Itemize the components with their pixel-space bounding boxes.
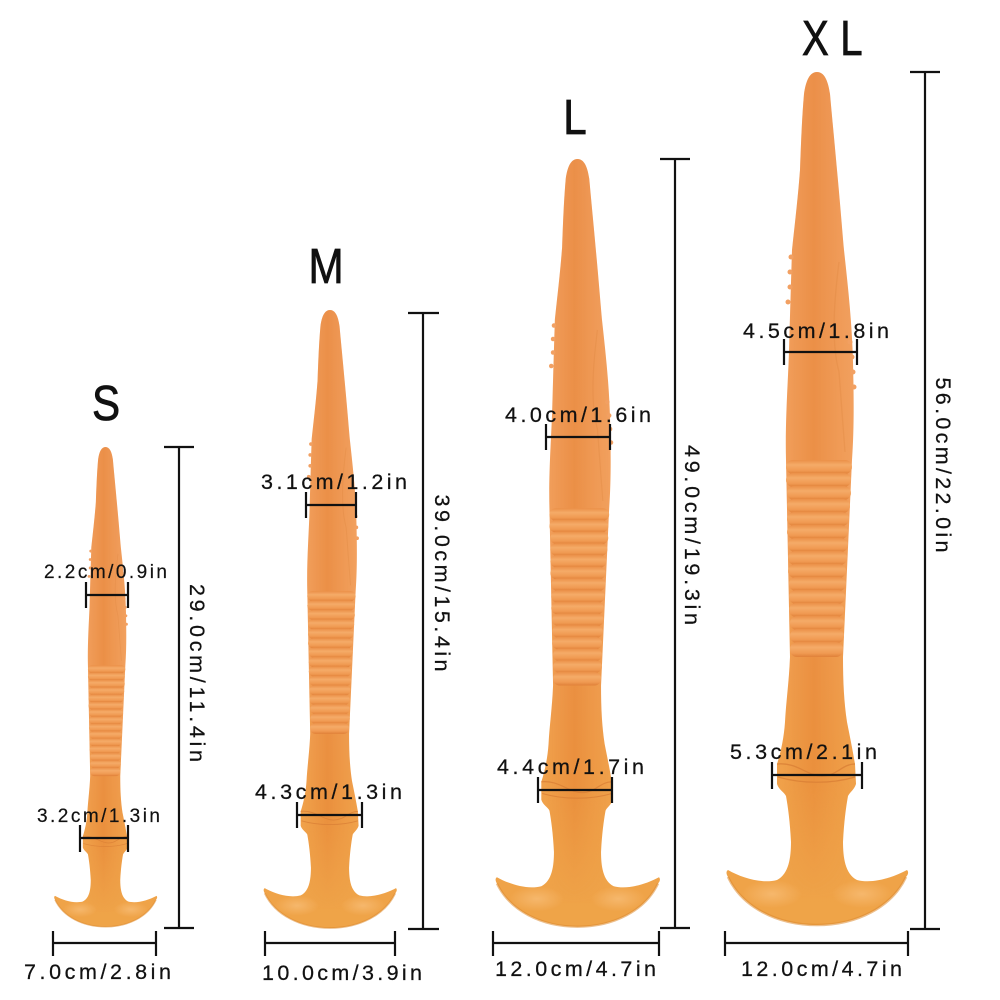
height dimension S bbox=[164, 447, 209, 928]
panel: size M bbox=[255, 239, 454, 985]
height dimension L: 49.0cm/19.3in bbox=[680, 445, 704, 625]
upper width M bbox=[261, 470, 407, 518]
lower width XL: 5.3cm/2.1in bbox=[730, 740, 877, 764]
upper width S: 2.2cm/0.9in bbox=[44, 562, 167, 583]
height dimension XL: 56.0cm/22.0in bbox=[931, 378, 955, 552]
base width XL: 12.0cm/4.7in bbox=[741, 957, 902, 981]
base width L: 12.0cm/4.7in bbox=[495, 957, 656, 981]
heading: XL: XL bbox=[802, 11, 874, 66]
height dimension M: 39.0cm/15.4in bbox=[430, 494, 454, 672]
lower width S bbox=[37, 806, 160, 852]
lower width XL bbox=[730, 740, 877, 789]
height dimension S: 29.0cm/11.4in bbox=[185, 584, 209, 762]
lower width L bbox=[497, 755, 644, 803]
lower width S: 3.2cm/1.3in bbox=[37, 806, 160, 827]
panel: size XL bbox=[725, 11, 955, 981]
base width L bbox=[493, 931, 659, 981]
lower width M: 4.3cm/1.3in bbox=[255, 780, 402, 804]
product S bbox=[54, 447, 157, 927]
height dimension XL bbox=[910, 72, 955, 929]
base width XL bbox=[725, 931, 908, 981]
lower width M bbox=[255, 780, 402, 828]
lower width L: 4.4cm/1.7in bbox=[497, 755, 644, 779]
upper width L: 4.0cm/1.6in bbox=[505, 403, 651, 427]
base width S bbox=[24, 931, 171, 984]
heading: M: M bbox=[308, 239, 344, 294]
upper width M: 3.1cm/1.2in bbox=[261, 470, 407, 494]
panel: size S bbox=[24, 376, 209, 984]
heading: S: S bbox=[92, 376, 120, 431]
product L bbox=[496, 159, 660, 927]
product XL bbox=[726, 72, 908, 925]
upper width S bbox=[44, 562, 167, 608]
heading: L: L bbox=[563, 90, 587, 145]
upper width L bbox=[505, 403, 651, 450]
base width M: 10.0cm/3.9in bbox=[262, 961, 422, 985]
height dimension L bbox=[660, 159, 704, 928]
base width S: 7.0cm/2.8in bbox=[24, 960, 171, 984]
height dimension M bbox=[408, 313, 454, 929]
upper width XL: 4.5cm/1.8in bbox=[743, 319, 889, 343]
upper width XL bbox=[743, 319, 889, 365]
base width M bbox=[262, 931, 422, 985]
product M bbox=[264, 310, 397, 928]
panel: size L bbox=[493, 90, 704, 981]
